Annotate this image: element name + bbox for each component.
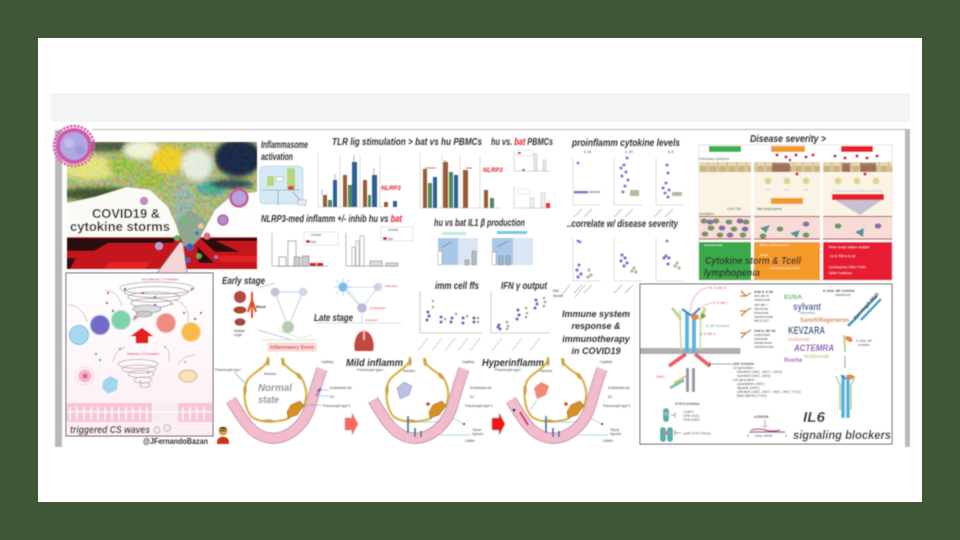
antisense oligo: 5' <box>747 434 750 438</box>
small viruses <box>230 190 248 206</box>
STAT3 inhibitor: OPB-31121 <box>683 414 700 418</box>
alveolus: mild inflammation: EC <box>470 395 475 399</box>
JAK inhibitor list: peficitinib (JAK1, JAK2 > JAK1, JAK2, TYK2) <box>737 390 801 394</box>
late stage diagram: Activation <box>365 318 378 322</box>
panel: disease severity stages <box>699 145 892 280</box>
JAK inhibitor list: BMS-986165 (TYK2) <box>737 394 767 398</box>
orange and red callouts <box>771 191 884 215</box>
heading: cytokine storm and T cell lymphopenia: lymphopenia <box>704 268 760 279</box>
antibody lists: clazakizumab <box>754 315 774 319</box>
alveolus: normal state: EC <box>330 395 335 399</box>
alveolus: hyperinflammation: Tissue <box>610 428 619 432</box>
stage notes: ↑ IL-6, TNF-α, IL-1β <box>829 254 856 258</box>
white cloud right <box>200 192 257 238</box>
label: inflammatory storm: Inflammatory Storm <box>270 345 315 351</box>
STAT3 inhibitor <box>660 402 711 442</box>
alveolus: hyperinflammation: Pneumocyte type II <box>603 404 630 408</box>
brand labels: sarilumab <box>788 337 810 343</box>
heading: cytokine storm and T cell lymphopenia: Cytokine storm & Tcell <box>705 256 801 267</box>
label: NLRP3: NLRP3 <box>483 168 503 174</box>
antibody glyphs <box>740 291 751 338</box>
text: immune system response and immunotherapy <box>562 309 631 356</box>
heading: TLR ligand stimulation: TLR lig stimulation > bat vs hu PBMCs <box>332 137 482 148</box>
alveolar wall <box>245 357 306 422</box>
organs <box>234 291 266 337</box>
inflammasome diagram <box>260 166 306 206</box>
JAK inhibitor list <box>710 361 801 398</box>
pale title band <box>51 93 910 122</box>
stage notes <box>704 243 869 275</box>
alveolus: mild inflammation: Pneumocyte type II <box>465 404 492 408</box>
panel: tornado image <box>58 139 262 269</box>
macrophages <box>765 178 879 190</box>
red virus particles <box>775 153 879 176</box>
bar chart: hu vs bat bottom <box>514 187 550 208</box>
JAK inhibitor list: baricitinib (JAK1, JAK2) <box>737 374 770 378</box>
alveolus: hyperinflammation: hypoxia <box>610 432 621 436</box>
STAT3 inhibitor: OPB-51602 <box>683 418 700 422</box>
brand labels: ACTEMRA <box>793 343 834 354</box>
bar chart: NLRP3 inhibition A: Human <box>311 233 322 237</box>
JAK inhibitor list: upadacitinib (JAK1) <box>737 382 765 386</box>
brand labels: EUSA <box>784 294 802 301</box>
activated macrophage <box>534 382 549 399</box>
capillary <box>231 369 322 438</box>
bar chart: NLRP3 inhibition B: Human <box>388 228 399 232</box>
bar chart: NLRP3 inhibition B: Bat <box>388 237 393 241</box>
site labels <box>690 286 730 336</box>
secondary cytokines funnel: SECONDARY CYTOKINES <box>141 278 179 282</box>
cell membrane <box>640 348 740 354</box>
small cells <box>76 367 197 394</box>
STAT3 inhibitor: cyclic STAT3 decoy <box>683 432 711 436</box>
T cells in blood vessel <box>699 216 892 239</box>
antibody lists: satralizumab <box>754 341 772 345</box>
heading: early stage: Early stage <box>222 276 265 287</box>
alveolus: mild inflammation <box>357 357 492 443</box>
olamkicept section: IL-6/sIL-6R <box>856 339 872 343</box>
stage notes: Fever <box>760 253 768 257</box>
arrow: red up arrow <box>131 328 153 343</box>
stage columns: Mild lymphopenia <box>757 207 782 211</box>
antibody lists: Anti site I <box>754 303 767 307</box>
stage columns <box>699 146 892 280</box>
antibody lists: Anti site III <box>754 294 769 298</box>
dot plots: disease severity <box>573 238 684 293</box>
arrow: bright red <box>492 413 505 435</box>
text: immune system response and immunotherapy: immunotherapy <box>562 334 631 344</box>
JAK inhibitor list: filgotinib (JAK1) <box>737 386 759 390</box>
slide white card <box>38 38 922 502</box>
alveolus: mild inflammation: Tissue <box>472 428 481 432</box>
label: normal state <box>258 383 292 406</box>
label: mild inflammation: Mild inflamm <box>346 358 403 369</box>
heading: signaling blockers: signaling blockers <box>793 430 891 442</box>
text: immune system response and immunotherapy: Immune system <box>562 309 630 319</box>
antibody lists: tocilizumab <box>754 333 770 337</box>
activated receptor <box>843 375 848 418</box>
antisense oligo: block mRNA <box>755 434 774 438</box>
alveolus: normal state <box>215 357 352 438</box>
olamkicept section <box>823 289 881 418</box>
panel: triggered CS waves <box>66 273 213 436</box>
heading: COVID19 and cytokine storms: COVID19 & <box>92 207 160 221</box>
dot plots: cytokine levels: IL-1R <box>625 150 633 154</box>
label: hyperinflammation: Hyperinflamm <box>482 358 544 369</box>
heading: inflammasome activation: Inflammasome <box>261 140 308 151</box>
alveolus: normal state: Endothelial cell <box>330 386 352 390</box>
alveolus: hyperinflammation: EC <box>608 395 613 399</box>
bar chart: NLRP3 inhibition A: Bat <box>311 240 316 244</box>
late stage diagram: Infiltration <box>385 284 398 288</box>
text: immune system response and immunotherapy: in COVID19 <box>571 346 621 356</box>
heading: NLRP3 inflammation: NLRP3-med inflamm +/- inhib hu vs bat <box>261 214 403 225</box>
organs: organ <box>234 333 242 337</box>
stage notes: Lymphopenia, CD4+ T cells, <box>829 265 867 269</box>
alveolus: hyperinflammation: Endothelial cell <box>608 386 630 390</box>
dot plot: IFN gamma output: Severe <box>553 294 563 298</box>
alveolus: normal state: Capillary <box>321 360 334 364</box>
JAK inhibitor list: 2nd generation: <box>733 378 755 382</box>
antibody lists: MEDI 5117 <box>754 319 770 323</box>
alveolus: mild inflammation: Alveolus <box>403 369 415 373</box>
STAT3 inhibitor: C188-9 <box>683 410 694 414</box>
stage notes: Fever, cough, fatigue, myalgia <box>829 245 869 249</box>
heading: COVID19 and cytokine storms: cytokine storms <box>70 220 170 234</box>
zoom wedge <box>157 242 187 273</box>
heading: hu vs bat PBMCs: hu vs. bat PBMCs <box>491 137 553 148</box>
brand labels: KEVZARA <box>788 325 825 337</box>
immune cells <box>70 310 200 344</box>
olamkicept section: IL-6/sIL-6R inhibitor <box>823 289 856 293</box>
antibody lists: Anti-IL-6 Ab <box>754 290 773 294</box>
organs: Blood <box>256 305 266 309</box>
brand labels <box>784 294 849 364</box>
composite figure <box>54 126 910 447</box>
bar chart: hu vs bat top <box>514 150 550 171</box>
dot plots: cytokine levels <box>573 150 684 217</box>
brand labels: Sanofi/Regeneron <box>800 318 849 324</box>
site labels: IL-6 site I <box>713 301 728 305</box>
alveolus: hyperinflammation <box>495 357 630 443</box>
late stage diagram <box>316 278 401 351</box>
stage notes: Asymptomatic <box>704 243 723 247</box>
stage columns: Circulation <box>699 212 714 216</box>
bar chart: human PBMCs <box>420 153 500 208</box>
alveolus: mild inflammation: Pneumocyte type I <box>357 368 384 372</box>
alveolus: normal state: Pneumocyte type I <box>215 368 242 372</box>
cytokine dots <box>106 288 202 320</box>
dot plot: IFN gamma output: Mild <box>553 289 559 293</box>
dot plot: IFN gamma output <box>491 285 585 351</box>
panel: IL6 signaling blockers <box>640 284 892 444</box>
image frame <box>55 129 910 447</box>
antibody lists: siltuximab <box>754 307 768 311</box>
arrow: light red <box>345 413 358 435</box>
heading: IL6: IL6 <box>803 409 826 426</box>
heading: inflammasome activation: activation <box>261 152 293 163</box>
stage notes: CD8+ T cells low <box>829 271 852 275</box>
alveolus: normal state: Pneumocyte type II <box>323 404 350 408</box>
text: immune system response and immunotherapy: response & <box>571 321 621 331</box>
JAK inhibitor list: JAK inhibitor <box>733 362 755 366</box>
credit: @JFernandoBazan <box>143 437 208 446</box>
brand labels: siltuximab <box>800 311 815 315</box>
primary cytokines funnel <box>95 346 195 388</box>
intestinal epithelium <box>67 403 212 433</box>
heading: cytokine storm and T cell lymphopenia <box>704 256 801 279</box>
alveolus: hyperinflammation: Alveolus <box>540 369 552 373</box>
site labels: IL-6 site III <box>710 286 727 290</box>
heading: COVID19 and cytokine storms <box>70 207 170 234</box>
slide infographic <box>38 38 922 502</box>
JAK inhibitor list: 1st generation: <box>733 366 754 370</box>
antibody lists: sarilumab <box>754 337 768 341</box>
olamkicept section: Ferring/I-Mab <box>853 291 881 321</box>
olamkicept section: olamkicept <box>835 293 850 297</box>
label: normal state: state <box>258 395 279 406</box>
dot plot: immune cell functions <box>418 291 482 351</box>
heading: proinflammatory cytokine levels: proinflamm cytokine levels <box>571 138 680 149</box>
dot plots: cytokine levels: IL-1b <box>584 150 591 154</box>
red floor <box>67 237 257 269</box>
label: NLRP3: NLRP3 <box>381 186 401 192</box>
alveolus: hyperinflammation: Pneumocyte type I <box>495 368 522 372</box>
late stage diagram: proliferation <box>370 306 386 310</box>
wall cell bumps <box>243 358 303 423</box>
alveolar macrophage <box>397 382 412 399</box>
bar chart: NLRP3 inhibition A <box>272 232 338 266</box>
icon: coronavirus <box>54 126 94 166</box>
stage columns: CD4 CD8 <box>727 207 741 211</box>
primary cytokines funnel: PRIMARY CYTOKINES <box>127 352 159 356</box>
alveolus: mild inflammation: Endothelial cell <box>470 386 492 390</box>
icon: avatar <box>217 427 229 444</box>
heading: correlate with disease severity: ..correlate w/ disease severity <box>567 219 678 230</box>
antisense oligo <box>747 415 788 438</box>
bar chart: NLRP3 inhibition B <box>346 227 413 266</box>
dot plots: cytokine levels: IL-6 <box>668 150 674 154</box>
alveolus: hyperinflammation: LMWH <box>603 439 613 443</box>
IL6 receptor <box>669 308 710 392</box>
heading: immune cell functions: imm cell ffs <box>435 281 479 292</box>
JAK inhibitor list: tofacitinib (JAK1, JAK2 > JAK3) <box>737 370 782 374</box>
JAK label: SAP2 <box>656 375 665 379</box>
site labels: IL-6R domain2 <box>706 324 730 328</box>
olamkicept section: complex <box>858 343 870 347</box>
bar chart: IL1 beta production <box>438 231 533 265</box>
secondary cytokines funnel <box>68 278 194 322</box>
brand labels: Roche <box>784 358 803 364</box>
antibody lists: sirukumab <box>754 311 769 315</box>
antibody lists: olokizumab <box>754 298 770 302</box>
alveolus: hyperinflammation: Capillary <box>600 360 613 364</box>
type II pneumocyte <box>287 401 304 418</box>
alveolus: mild inflammation: Capillary <box>462 360 475 364</box>
STAT3 inhibitor: STAT3 inhibitor <box>675 402 700 406</box>
brand labels: tocilizumab <box>804 354 829 360</box>
alveolus: mild inflammation: LMWH <box>465 439 475 443</box>
heading: disease severity: Disease severity > <box>750 134 826 145</box>
heading: IFN gamma output: IFN γ output <box>501 281 548 292</box>
antibody lists: vobarilizumab <box>754 345 774 349</box>
brand labels: sylvant <box>793 302 822 313</box>
early stage diagram <box>234 283 316 340</box>
label: normal state: Normal <box>258 383 292 394</box>
stage notes: Low lymphocyte count <box>770 266 800 270</box>
bar chart: bat PBMCs <box>318 153 397 207</box>
leakage bars <box>546 416 559 437</box>
site labels: IL-6 site II <box>700 332 716 336</box>
stage notes: Mild or mild-to-severe <box>760 243 789 247</box>
antibody lists <box>754 290 776 349</box>
heading: inflammasome activation <box>261 140 308 163</box>
organs: Multiple <box>234 329 245 333</box>
leakage bars <box>408 416 421 437</box>
alveolus: normal state: Alveolus <box>264 372 276 376</box>
white cloud left <box>67 187 180 238</box>
antisense oligo: AZD9150 <box>754 415 769 419</box>
alveolus: mild inflammation: hypoxia <box>472 432 483 436</box>
funnel base <box>176 210 207 246</box>
heading: late stage: Late stage <box>314 313 353 324</box>
caption: triggered CS waves <box>70 425 150 436</box>
stage columns: Pulmonary epithelium <box>699 157 730 161</box>
antibody lists: Anti-IL-6R Ab <box>754 329 776 333</box>
antisense oligo: 3' <box>785 434 788 438</box>
heading: IL1 beta production: hu vs bat IL1 β production <box>434 218 525 229</box>
